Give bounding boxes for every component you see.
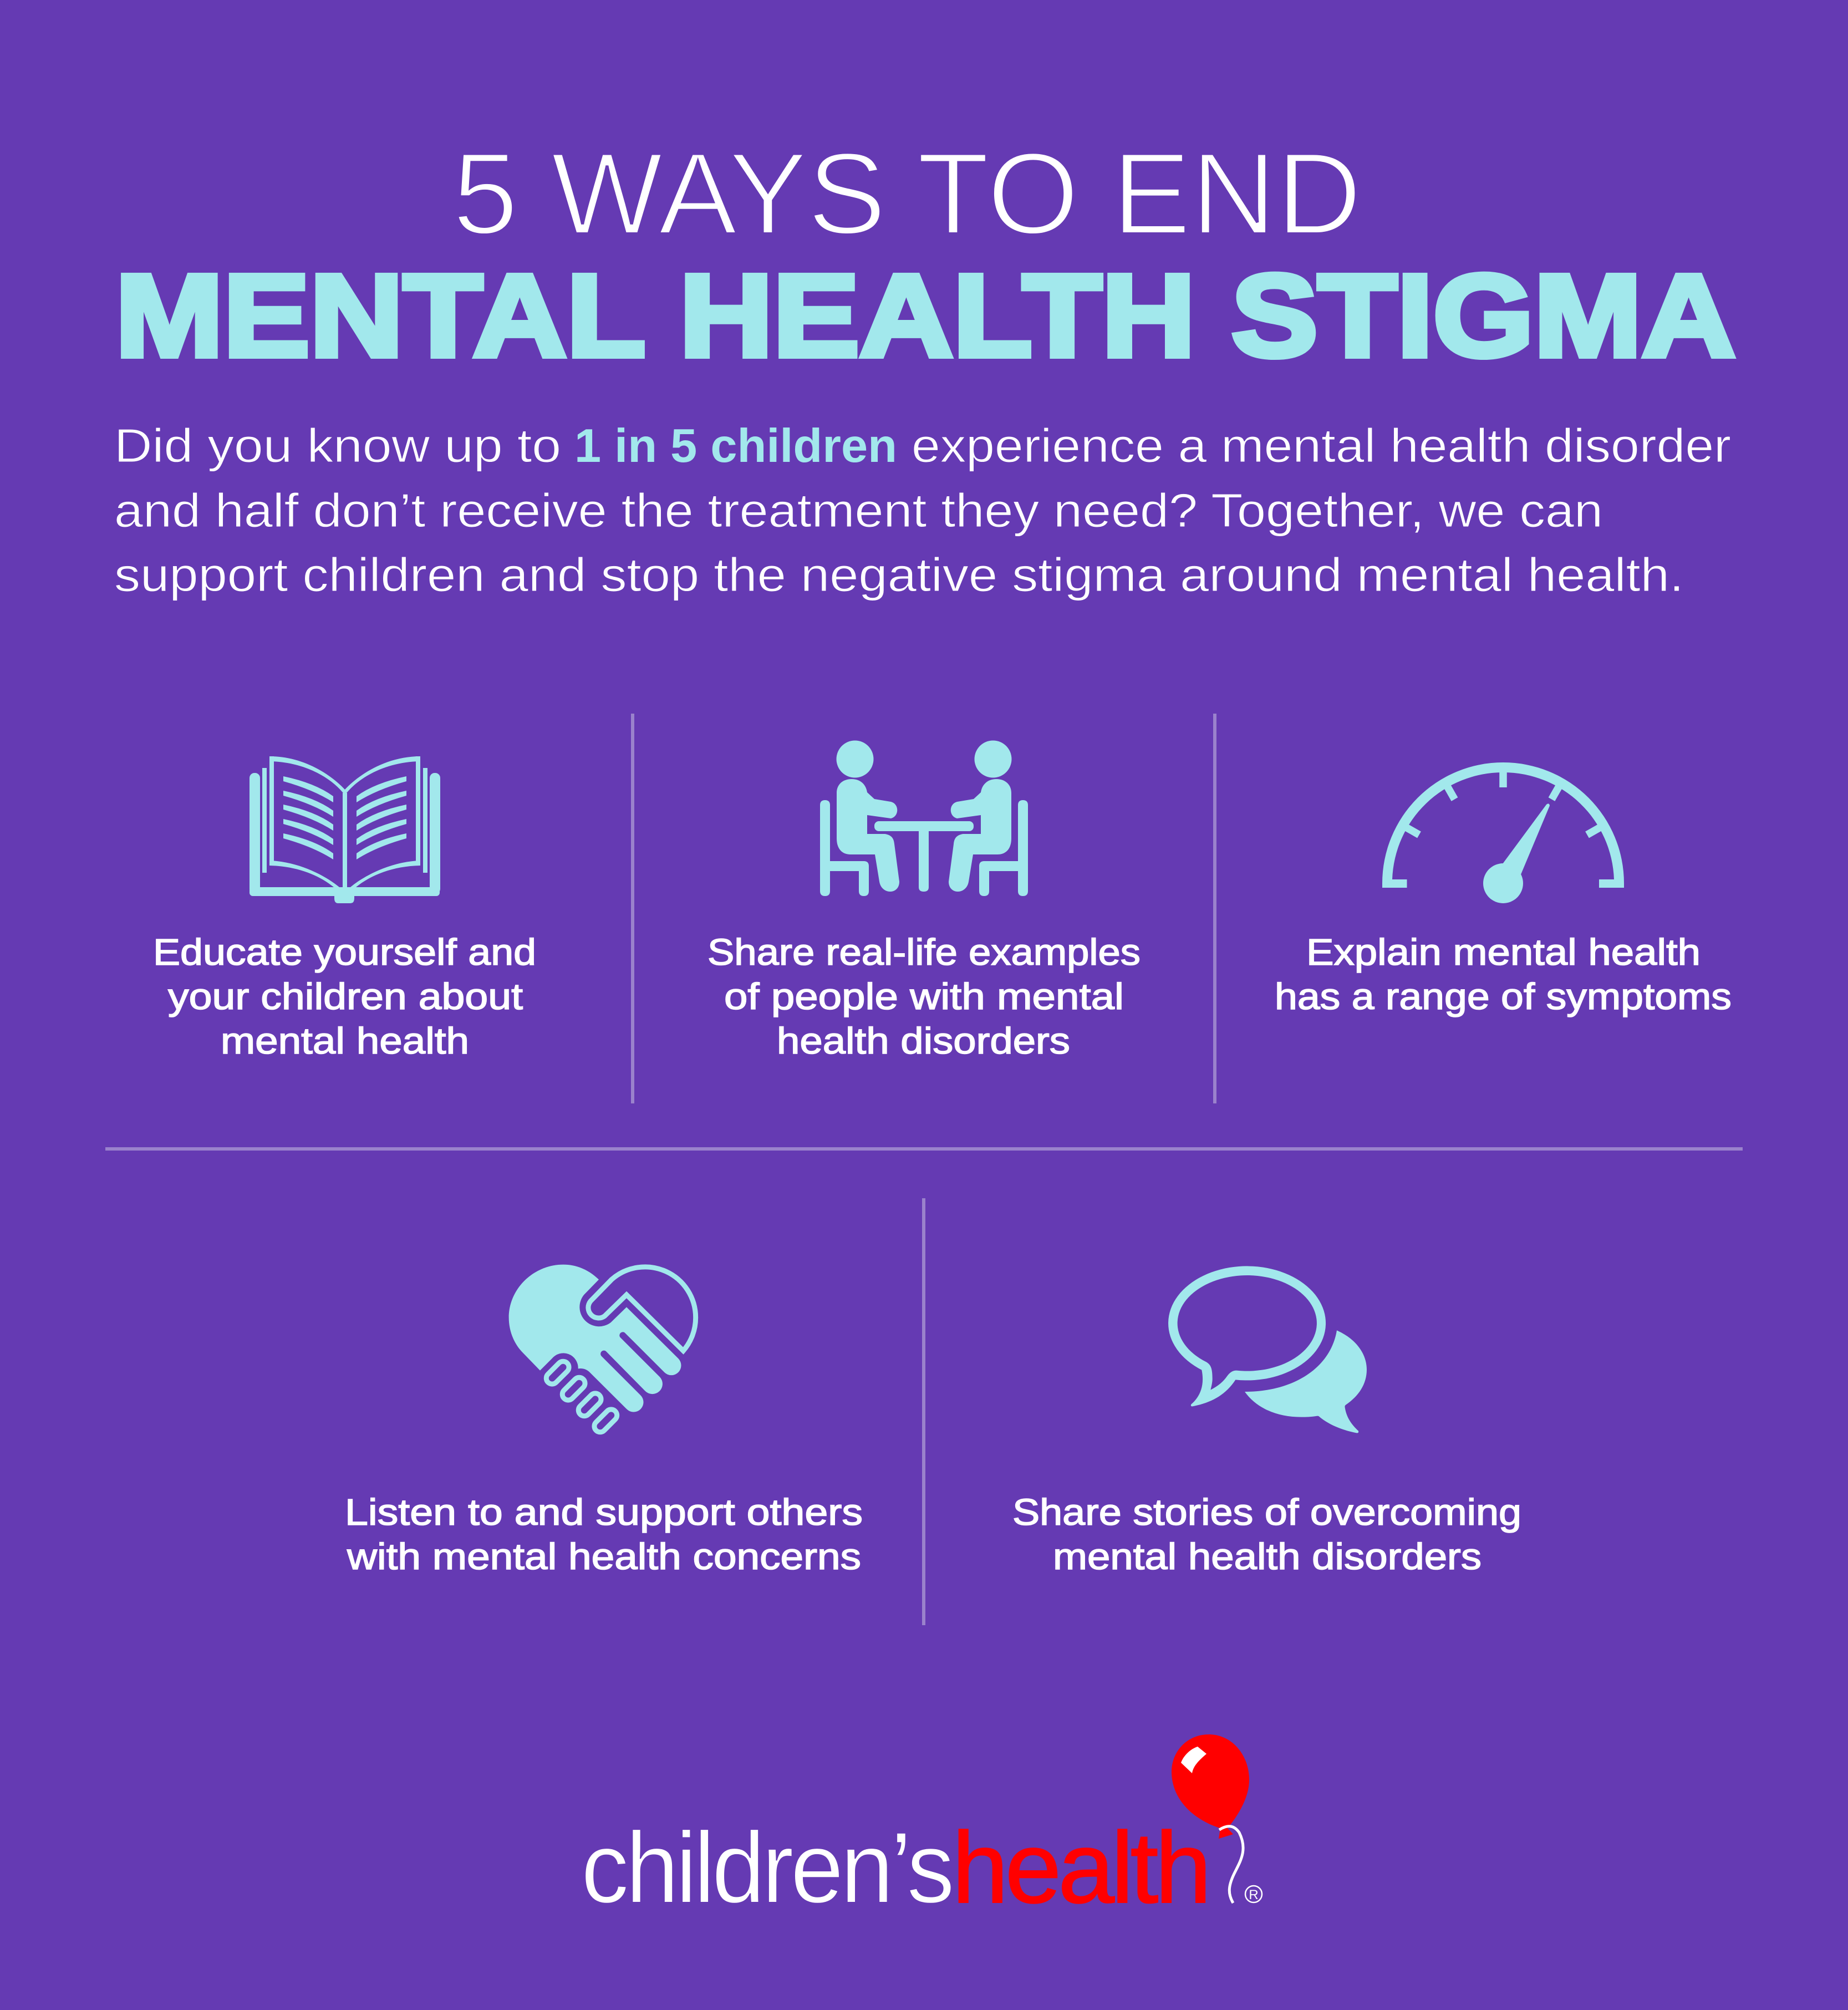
caption: explain symptoms	[1275, 932, 1732, 1017]
registered mark	[1245, 1886, 1262, 1902]
caption: listen and support	[345, 1492, 863, 1578]
panel: explain symptoms	[1275, 762, 1732, 1017]
caption: educate: mental health	[221, 1020, 469, 1062]
title line 1: 5 WAYS TO END	[452, 129, 1362, 258]
caption: share stories: Share stories of overcoming	[1012, 1492, 1521, 1533]
intro paragraph	[114, 420, 1731, 602]
registered mark: R	[1249, 1887, 1259, 1902]
caption: educate: your children about	[168, 976, 523, 1017]
caption: educate: Educate yourself and	[153, 932, 536, 973]
panel: educate	[153, 756, 536, 1062]
intro paragraph: and half don’t receive the treatment they need? Together, we can	[114, 485, 1603, 537]
icon: red balloon	[1172, 1734, 1249, 1903]
panel: share examples	[707, 741, 1141, 1062]
caption: share stories: mental health disorders	[1053, 1536, 1482, 1578]
logo: children's health	[581, 1734, 1262, 1924]
icon: two people at a table	[820, 741, 1028, 896]
logo wordmark: health	[952, 1811, 1208, 1924]
icon: speech bubbles	[1168, 1266, 1367, 1433]
panel: share stories	[1012, 1266, 1521, 1578]
caption: educate	[153, 932, 536, 1062]
panel: listen and support	[345, 1265, 863, 1578]
caption: explain symptoms: has a range of symptoms	[1275, 976, 1732, 1017]
caption: listen and support: with mental health concerns	[347, 1536, 861, 1578]
caption: share examples: of people with mental	[724, 976, 1124, 1017]
caption: share examples: Share real-life examples	[707, 932, 1141, 973]
logo wordmark: children’s	[581, 1811, 951, 1924]
intro paragraph: Did you know up to	[114, 420, 561, 472]
icon: gauge	[1382, 762, 1624, 903]
title line 2: MENTAL HEALTH STIGMA	[115, 250, 1735, 381]
caption: share stories	[1012, 1492, 1521, 1578]
logo wordmark	[581, 1811, 1208, 1924]
caption: explain symptoms: Explain mental health	[1306, 932, 1701, 973]
caption: listen and support: Listen to and support others	[345, 1492, 863, 1533]
icon: handshake heart	[509, 1265, 696, 1434]
intro paragraph: support children and stop the negative stigma around mental health.	[114, 549, 1684, 602]
intro paragraph: experience a mental health disorder	[912, 420, 1731, 472]
icon: open book	[250, 756, 440, 903]
intro paragraph: 1 in 5 children	[574, 420, 897, 472]
title	[115, 129, 1735, 381]
caption: share examples	[707, 932, 1141, 1062]
caption: share examples: health disorders	[777, 1020, 1070, 1062]
